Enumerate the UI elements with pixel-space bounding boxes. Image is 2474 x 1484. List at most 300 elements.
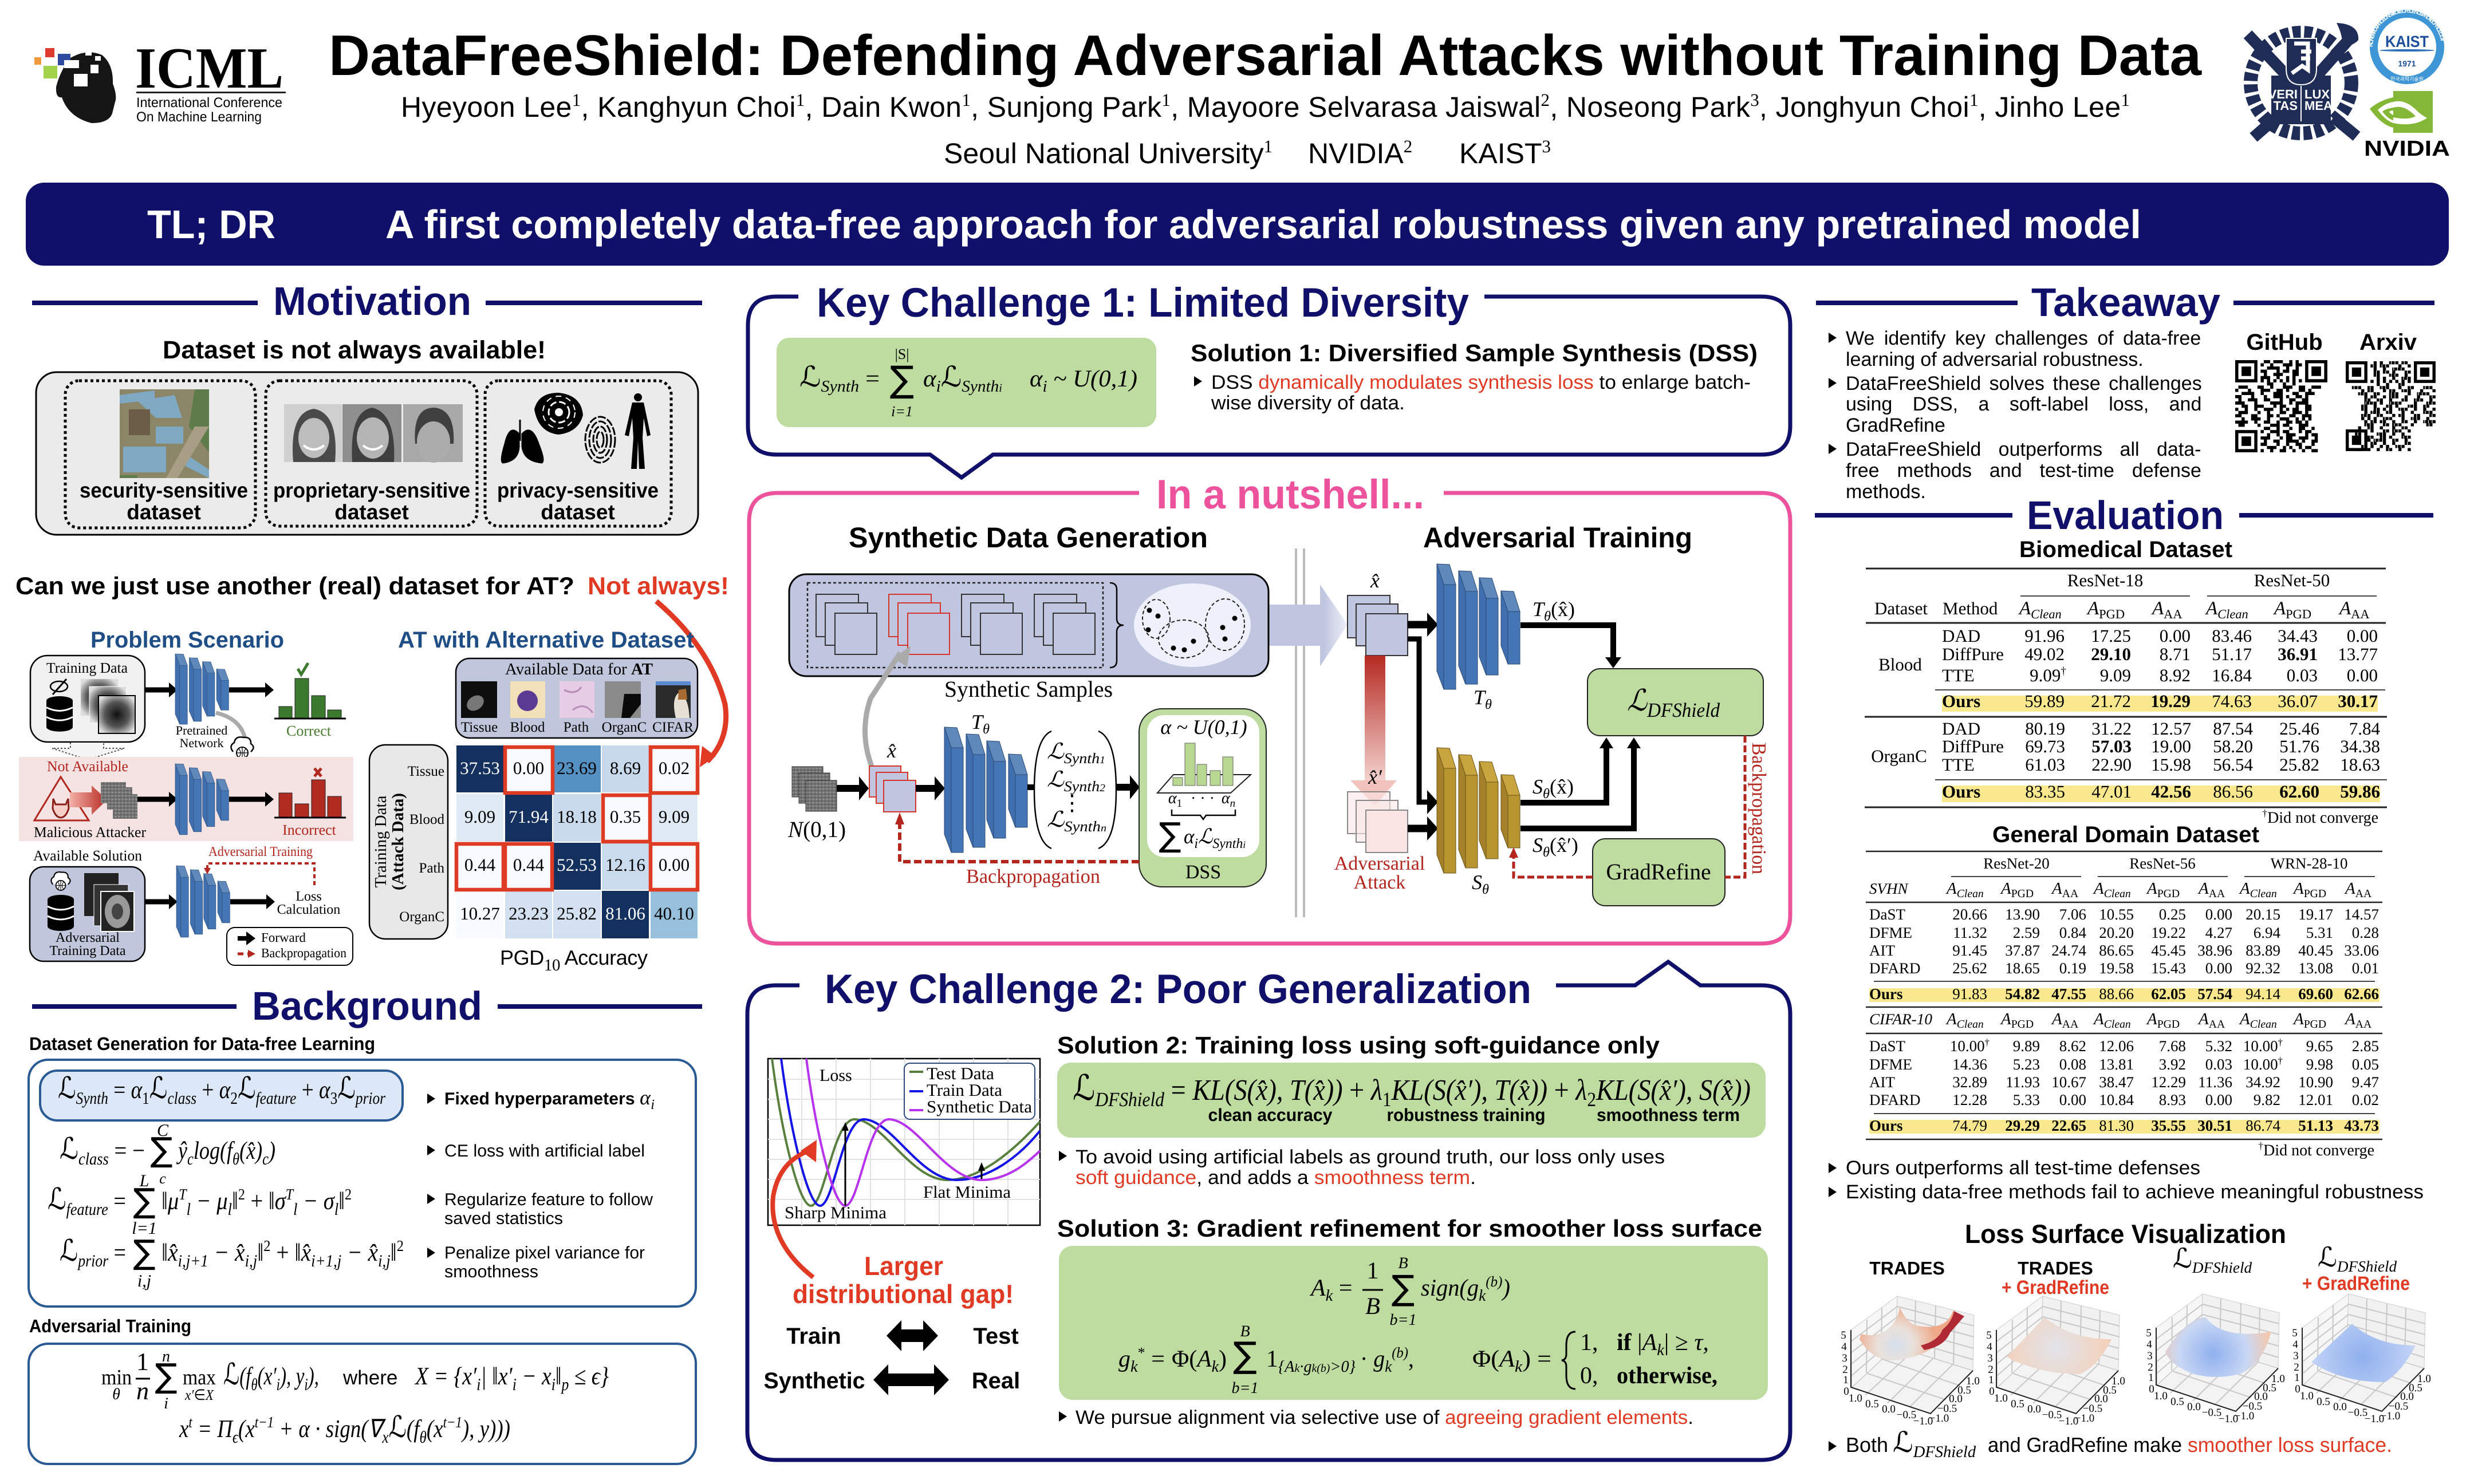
formula box: gradient refinement: gk* = xyxy=(1118,1344,1165,1376)
panel: key challenge 1 xyxy=(748,280,1790,477)
plot: L DFShield plus GradRefine: 0.5 xyxy=(2317,1396,2330,1408)
table: general domain: 10.55 xyxy=(2099,906,2134,923)
formula: L prior: ‖x̂i,j+1 − x̂i,j‖2 + ‖x̂i+1,j − x̂i,j‖2 xyxy=(161,1237,404,1270)
band: attacker xyxy=(19,757,353,841)
solution 1 heading: Solution 1: Diversified Sample Synthesis (DSS) xyxy=(1191,340,1758,366)
plot: L DFShield plus GradRefine: 1.0 xyxy=(2300,1390,2314,1402)
dashed backprop left xyxy=(895,812,1139,887)
plot: TRADES plus GradRefine: 1.0 xyxy=(1994,1392,2008,1404)
plot: L DFShield: −0.5 xyxy=(2243,1400,2262,1412)
math labels: Tθ xyxy=(1474,686,1492,712)
logo: KAIST: 한국과학기술원 xyxy=(2390,76,2424,82)
heatmap: 40.10 xyxy=(654,903,694,923)
table: general domain: 12.06 xyxy=(2099,1037,2134,1055)
formula box: L synth: αi ~ U(0,1) xyxy=(1030,366,1137,396)
plot: TRADES plus GradRefine: 2 xyxy=(1988,1364,1994,1376)
network: adversarial training xyxy=(176,866,230,937)
table: general domain: 34.92 xyxy=(2245,1073,2280,1091)
heatmap: 8.69 xyxy=(610,758,641,778)
formula box: gradient refinement: 1 xyxy=(1366,1258,1379,1284)
table: general domain: 47.55 xyxy=(2051,985,2086,1003)
loss list: ⋮ xyxy=(1061,791,1083,815)
plot: TRADES plus GradRefine: −1.0 xyxy=(2059,1415,2078,1427)
heatmap: 12.16 xyxy=(605,855,645,875)
table: general domain: 40.45 xyxy=(2298,942,2333,959)
labels: security-sensitive xyxy=(80,479,248,502)
subheading: dataset generation: Dataset Generation for Data-free Learning xyxy=(29,1033,375,1054)
table: general domain: AAA xyxy=(2052,1010,2078,1031)
plot: L DFShield: −1.0 xyxy=(2235,1410,2254,1422)
bullet notes xyxy=(427,1086,655,1281)
plot: L DFShield plus GradRefine: 1.0 xyxy=(2417,1373,2431,1385)
logo: Seoul National University: MEA xyxy=(2304,98,2333,113)
table: biomedical: 34.43 xyxy=(2278,626,2318,646)
arrow xyxy=(230,894,275,909)
bullet list: DataFreeShield outperforms all data- xyxy=(1846,439,2201,460)
table: biomedical: 58.20 xyxy=(2213,736,2253,756)
table: general domain: 14.36 xyxy=(1952,1056,1987,1073)
formula box: DFShield loss: smoothness term xyxy=(1597,1105,1740,1125)
panel: key challenge 2 xyxy=(747,962,1790,1460)
formula box: gradient refinement: sign(gk(b)) xyxy=(1421,1273,1510,1305)
plot: TRADES xyxy=(1841,1296,1980,1427)
logo: KAIST: 1971 xyxy=(2398,59,2416,68)
table: biomedical: 61.03 xyxy=(2025,755,2065,775)
table: biomedical: Blood xyxy=(1878,654,1922,674)
available data box: CIFAR xyxy=(652,720,694,735)
plot: TRADES plus GradRefine: 4 xyxy=(1987,1341,1992,1353)
bar chart: correct: Correct xyxy=(286,723,332,739)
table: general domain: AAA xyxy=(2052,879,2078,900)
table: biomedical: 56.54 xyxy=(2213,755,2253,775)
formula: min max: ℒ(fθ(x′i), yi), xyxy=(223,1357,319,1394)
plot: L DFShield plus GradRefine xyxy=(2292,1294,2431,1425)
diagram: problem scenario xyxy=(19,654,353,965)
logo: ICML: International Conference xyxy=(136,95,282,110)
DSS box: · · · xyxy=(1191,790,1215,807)
heading: Evaluation: Evaluation xyxy=(2027,493,2224,538)
not available arrow xyxy=(52,743,124,760)
solution 3 heading: Solution 3: Gradient refinement for smoother loss surface xyxy=(1057,1215,1762,1242)
synthetic samples box xyxy=(789,574,1268,676)
DSS box: α1 xyxy=(1168,790,1182,810)
formula box: gradient refinement: Φ(Ak) xyxy=(1172,1346,1227,1376)
arrow xyxy=(1116,775,1140,799)
solution 2 text: soft guidance , and adds a smoothness term . xyxy=(1076,1167,1476,1189)
feature space ellipse xyxy=(1134,583,1251,667)
plot: TRADES plus GradRefine: 5 xyxy=(1986,1329,1992,1341)
plot: L DFShield: 4 xyxy=(2146,1339,2152,1351)
table: general domain: APGD xyxy=(2001,879,2034,900)
arrow xyxy=(916,776,945,800)
arrow xyxy=(837,776,869,800)
table: general domain: 11.93 xyxy=(2006,1073,2040,1091)
formula: min max xyxy=(101,1348,609,1447)
table: biomedical: OrganC xyxy=(1871,746,1927,766)
formula: L class: c xyxy=(159,1170,166,1187)
logo: KAIST: KAIST xyxy=(2385,33,2429,50)
x-hat stack: x̂ xyxy=(887,739,896,762)
table: general domain: 10.00† xyxy=(2243,1055,2283,1073)
table: general domain: 14.57 xyxy=(2344,906,2379,923)
heatmap: 0.44 xyxy=(464,855,496,875)
table: general domain: 62.05 xyxy=(2151,985,2186,1003)
formula box: gradient refinement: Ak = xyxy=(1309,1275,1353,1305)
formula: L feature: l=1 xyxy=(132,1219,157,1238)
table: general domain: 6.94 xyxy=(2254,924,2280,941)
table: general domain: AIT xyxy=(1869,1073,1895,1091)
table: biomedical: 36.91 xyxy=(2278,644,2318,664)
icon: cell xyxy=(534,393,583,435)
table: general domain: 0.28 xyxy=(2352,924,2379,941)
network: pretrained xyxy=(175,654,229,724)
subheading: biomedical: Biomedical Dataset xyxy=(2019,537,2232,562)
available data box: Available Data for AT xyxy=(505,660,653,678)
caption: PGD10 accuracy: PGD10 Accuracy xyxy=(500,946,648,974)
label: available solution: Available Solution xyxy=(33,847,142,864)
panel: motivation xyxy=(15,279,729,974)
plot labels: + GradRefine xyxy=(2302,1273,2410,1294)
math labels xyxy=(1472,598,1578,897)
logo: ICML: On Machine Learning xyxy=(136,109,262,125)
table: general domain: †Did not converge xyxy=(2258,1140,2374,1159)
gray arrow xyxy=(865,646,911,766)
panel: evaluation xyxy=(1815,493,2433,1461)
heatmap: 37.53 xyxy=(460,758,500,778)
table: general domain: 5.33 xyxy=(2013,1091,2040,1108)
heatmap: 81.06 xyxy=(605,903,645,923)
formula: L synth xyxy=(40,1071,403,1120)
math labels: Sθ xyxy=(1472,871,1489,897)
formula box: L synth: αiℒSynthi xyxy=(923,360,1002,396)
plot: TRADES plus GradRefine: −0.5 xyxy=(2042,1409,2062,1421)
train test synthetic real: Train xyxy=(786,1324,841,1349)
table: general domain: 0.25 xyxy=(2159,906,2186,923)
formula: min max: x′∈X xyxy=(184,1387,214,1403)
table: biomedical: 83.35 xyxy=(2025,782,2065,802)
table: general domain: 0.00 xyxy=(2205,960,2232,977)
table: biomedical: 22.90 xyxy=(2091,755,2132,775)
formula: min max: n xyxy=(136,1377,149,1405)
plot: L DFShield: 1.0 xyxy=(2154,1390,2168,1402)
table: general domain: 19.22 xyxy=(2151,924,2186,941)
axis label box: Tissue xyxy=(408,764,444,779)
table: general domain: AClean xyxy=(2240,879,2277,900)
plot: TRADES: 0.5 xyxy=(1865,1398,1879,1410)
table: general domain: APGD xyxy=(2147,879,2180,900)
table: general domain: 92.32 xyxy=(2245,960,2280,977)
table: general domain: 0.19 xyxy=(2059,960,2086,977)
table: general domain: 32.89 xyxy=(1952,1073,1987,1091)
table: general domain: 10.00† xyxy=(1950,1037,1990,1055)
formula: min max: xt = Πϵ(xt−1 + α · sign(∇xℒ(fθ(xt−1), y))) xyxy=(179,1410,510,1447)
adversarial training data box xyxy=(30,867,145,961)
math labels: Sθ(x̂) xyxy=(1533,775,1574,802)
table: general domain: 12.28 xyxy=(1952,1091,1987,1108)
label: loss calculation: Calculation xyxy=(277,902,340,917)
legend: Backpropagation xyxy=(261,946,346,960)
table: general domain: 9.65 xyxy=(2306,1037,2333,1055)
formula box: gradient refinement: ∑ xyxy=(1233,1334,1257,1376)
stack: x hat: x̂ xyxy=(1370,569,1380,592)
bullet notes: Fixed hyperparameters αi xyxy=(444,1086,655,1112)
table: biomedical: 19.00 xyxy=(2151,736,2191,756)
table: general domain: 0.00 xyxy=(2059,1091,2086,1108)
table: general domain: DaST xyxy=(1869,906,1905,923)
formula box: L synth xyxy=(777,338,1156,427)
table: general domain: 9.82 xyxy=(2254,1091,2280,1108)
heatmap: 52.53 xyxy=(557,855,597,875)
plot: L DFShield: −0.5 xyxy=(2202,1407,2221,1419)
DSS box: αiℒSynthi xyxy=(1184,825,1246,851)
heatmap: 0.35 xyxy=(610,807,641,827)
plot: L DFShield: 0.0 xyxy=(2254,1391,2268,1403)
formula box: gradient refinement: b=1 xyxy=(1232,1379,1258,1397)
stack: x hat xyxy=(1348,569,1408,656)
heatmap xyxy=(456,745,698,938)
table: biomedical: Ours xyxy=(1942,782,1980,802)
axis label box: OrganC xyxy=(399,909,444,925)
plot: L DFShield plus GradRefine: 0 xyxy=(2295,1383,2300,1395)
table: biomedical: 29.10 xyxy=(2091,644,2131,664)
heading: Key Challenge 1: Limited Diversity xyxy=(817,280,1469,326)
table: biomedical: TTE xyxy=(1942,665,1975,685)
logo: Seoul National University: LUX xyxy=(2304,87,2330,101)
table: biomedical: 8.71 xyxy=(2160,644,2191,664)
adversarial training data box: Adversarial xyxy=(56,930,120,945)
table: general domain: 69.60 xyxy=(2298,985,2333,1003)
table: general domain: DaST xyxy=(1869,1037,1905,1055)
chart: loss landscape: Train Data xyxy=(927,1081,1002,1100)
table: general domain: 0.84 xyxy=(2059,924,2087,941)
big arrow xyxy=(1268,585,1348,666)
bullet notes: Penalize pixel variance for xyxy=(444,1244,645,1262)
table: general domain: 22.65 xyxy=(2051,1117,2086,1134)
DSS box: αn xyxy=(1222,790,1235,810)
table: general domain: APGD xyxy=(2001,1010,2034,1031)
table: biomedical: AAA xyxy=(2152,598,2183,621)
plot: L DFShield plus GradRefine: −0.5 xyxy=(2348,1407,2367,1419)
chart: loss landscape xyxy=(768,1059,1040,1225)
plot: L DFShield: 3 xyxy=(2147,1350,2153,1362)
table: general domain: 12.29 xyxy=(2151,1073,2186,1091)
formula box: gradient refinement: 1, xyxy=(1580,1329,1598,1356)
solution 1 text xyxy=(1194,372,1751,414)
QR: GitHub xyxy=(2235,330,2327,452)
plot: TRADES: 5 xyxy=(1841,1329,1846,1341)
plot: TRADES: 1.0 xyxy=(1966,1375,1980,1387)
solution 2 text: To avoid using artificial labels as ground truth, our loss only uses xyxy=(1076,1146,1665,1168)
closing bullet xyxy=(1829,1426,2392,1461)
table: biomedical: 36.07 xyxy=(2278,691,2318,711)
plot: TRADES plus GradRefine: −1.0 xyxy=(2075,1412,2094,1424)
solution 3 text: We pursue alignment via selective use of agreeing gradient elements . xyxy=(1076,1407,1693,1428)
formula: min max: max xyxy=(183,1365,216,1390)
table: general domain: 7.68 xyxy=(2159,1037,2186,1055)
formula: min max: where xyxy=(342,1367,397,1389)
table: general domain: AClean xyxy=(2094,879,2131,900)
table: general domain: 91.83 xyxy=(1952,985,1987,1003)
formula: min max: min xyxy=(101,1365,132,1390)
table: general domain: 29.29 xyxy=(2005,1117,2040,1134)
plot: L DFShield plus GradRefine: 0.0 xyxy=(2400,1391,2414,1403)
table: general domain: 0.00 xyxy=(2205,1091,2232,1108)
plot labels: TRADES xyxy=(2018,1258,2093,1278)
box: GradRefine xyxy=(1593,839,1725,906)
plot: TRADES: 1 xyxy=(1843,1374,1849,1386)
chart: loss landscape: Sharp Minima xyxy=(785,1203,887,1222)
table: general domain: 5.31 xyxy=(2306,924,2333,941)
title: DataFreeShield: Defending Adversarial Attacks without Training Data xyxy=(329,23,2202,88)
formula: min max: X = {x′i| ‖x′i − xi‖p ≤ ϵ} xyxy=(414,1362,609,1394)
formula box: gradient refinement: if |Ak| ≥ τ, xyxy=(1617,1329,1709,1359)
table: general domain: AIT xyxy=(1869,942,1895,959)
heatmap: 25.82 xyxy=(557,903,597,923)
logo: NVIDIA: NVIDIA xyxy=(2364,137,2450,161)
formula box: gradient refinement: otherwise, xyxy=(1617,1363,1717,1389)
label and dashed arrow: adversarial training: Adversarial Training xyxy=(208,844,313,859)
table: general domain: 35.55 xyxy=(2151,1117,2186,1134)
table: general domain: 20.15 xyxy=(2245,906,2280,923)
table: general domain: SVHN xyxy=(1869,880,1909,897)
formula: L class: C xyxy=(157,1121,169,1140)
label: pretrained network xyxy=(176,723,227,750)
table: general domain: 8.93 xyxy=(2159,1091,2186,1108)
panel: in a nutshell xyxy=(749,472,1790,944)
table: biomedical: 30.17 xyxy=(2338,691,2378,711)
formula box: gradient refinement: B xyxy=(1365,1293,1380,1320)
plot: TRADES plus GradRefine: 0 xyxy=(1989,1386,1995,1398)
table: biomedical: 47.01 xyxy=(2091,782,2132,802)
table: biomedical: DiffPure xyxy=(1942,736,2004,756)
table: general domain: Ours xyxy=(1869,1117,1903,1134)
formula box: L synth: ℒSynth = xyxy=(799,360,880,396)
icon: lungs xyxy=(502,420,543,463)
table: biomedical: 59.89 xyxy=(2024,691,2065,711)
plot: L DFShield plus GradRefine: 0.5 xyxy=(2409,1382,2422,1394)
subheading: synthetic data generation: Synthetic Data Generation xyxy=(849,522,1208,554)
labels: dataset xyxy=(541,500,615,524)
arrow: red attack xyxy=(1350,656,1397,806)
table: general domain: DFARD xyxy=(1869,960,1921,977)
frame xyxy=(749,493,1790,944)
plot: L DFShield: 1.0 xyxy=(2271,1373,2285,1385)
formula box: gradient refinement: b=1 xyxy=(1390,1311,1416,1329)
image: aerial photo xyxy=(120,389,209,478)
subheading: general domain: General Domain Dataset xyxy=(1992,822,2259,847)
bullet list: We identify key challenges of data-free xyxy=(1846,327,2201,349)
formula: min max: n xyxy=(162,1348,170,1365)
plot: TRADES plus GradRefine: 3 xyxy=(1987,1352,1993,1364)
axis label box: Path xyxy=(419,861,444,876)
frame: speech bubble xyxy=(748,297,1790,477)
table: general domain: 20.20 xyxy=(2099,924,2134,941)
DSS box xyxy=(1139,709,1266,887)
heatmap: 0.00 xyxy=(513,758,544,778)
formula box: gradient refinement: 0, xyxy=(1580,1363,1598,1389)
diagram: AT with alternative dataset xyxy=(369,658,698,974)
bullet list: methods. xyxy=(1846,481,1926,503)
solution 1 text: DSS dynamically modulates synthesis loss to enlarge batch- xyxy=(1211,372,1751,393)
callout: larger distributional gap: distributional gap! xyxy=(793,1279,1014,1309)
table: general domain: 4.27 xyxy=(2205,924,2232,941)
table: biomedical: DAD xyxy=(1942,719,1980,739)
table: biomedical: 69.73 xyxy=(2025,736,2065,756)
arrows into T and S xyxy=(1408,613,1438,840)
arrow: gray copy xyxy=(213,713,245,779)
plot: TRADES: −1.0 xyxy=(1913,1415,1933,1427)
band: attacker: Incorrect xyxy=(282,822,337,838)
arrows into loss xyxy=(1520,625,1641,828)
formula box: L synth: i=1 xyxy=(891,403,913,420)
banner: TL;DR: TL; DR xyxy=(147,202,275,247)
labels: privacy-sensitive xyxy=(497,479,659,502)
network: T xyxy=(944,727,1027,852)
table: biomedical: 8.92 xyxy=(2160,665,2191,685)
formula: L synth: ℒSynth = α1ℒclass + α2ℒfeature + α3ℒprior xyxy=(58,1071,385,1108)
icon: cloud xyxy=(231,737,253,759)
table: general domain: APGD xyxy=(2294,879,2326,900)
table: biomedical: 83.46 xyxy=(2212,626,2252,646)
chart: loss landscape: Loss xyxy=(820,1066,852,1085)
plot: TRADES plus GradRefine: −0.5 xyxy=(2083,1403,2102,1415)
formula box: gradient refinement: · gk(b), xyxy=(1360,1344,1414,1376)
formula box: gradient refinement: B xyxy=(1240,1323,1250,1340)
labels: dataset xyxy=(334,500,409,524)
table: general domain: 38.47 xyxy=(2099,1073,2134,1091)
table: general domain: 43.73 xyxy=(2344,1117,2379,1134)
plot: L DFShield: 0.0 xyxy=(2187,1401,2201,1413)
box: L DFShield: ℒDFShield xyxy=(1627,685,1720,721)
plot: TRADES: 1.0 xyxy=(1849,1392,1862,1404)
table: general domain: AClean xyxy=(1947,1010,1984,1031)
plot: TRADES: −0.5 xyxy=(1897,1409,1916,1421)
table: general domain: 30.51 xyxy=(2197,1117,2232,1134)
table: general domain: 0.05 xyxy=(2352,1056,2379,1073)
label: T theta: Tθ xyxy=(971,711,990,737)
adversarial training data box: Training Data xyxy=(49,944,126,958)
formula: L feature xyxy=(48,1171,352,1238)
formula: L feature: ∑ xyxy=(133,1181,156,1220)
DSS box: ∑ xyxy=(1159,815,1181,854)
subheading: adversarial training: Adversarial Training xyxy=(29,1316,191,1336)
dashed backprop right xyxy=(1509,736,1770,877)
stack: x hat prime: x̂′ xyxy=(1368,765,1382,788)
formula: min max: ∑ xyxy=(155,1356,178,1395)
logo: ICML: ICML xyxy=(135,36,283,101)
label: loss calculation xyxy=(277,889,340,917)
bullet list: GradRefine xyxy=(1846,415,1945,436)
table: general domain: 0.03 xyxy=(2205,1056,2232,1073)
formula: min max: 1 xyxy=(136,1348,149,1376)
heatmap: 9.09 xyxy=(464,807,495,827)
plot: L DFShield plus GradRefine: −1.0 xyxy=(2365,1413,2384,1425)
plot: L DFShield plus GradRefine: −1.0 xyxy=(2381,1410,2400,1422)
table: biomedical: APGD xyxy=(2274,598,2311,621)
DSS box: α ~ U(0,1) xyxy=(1160,716,1247,739)
plot: L DFShield plus GradRefine: 2 xyxy=(2294,1361,2299,1374)
table: biomedical: 7.84 xyxy=(2349,719,2380,739)
bullet list: free methods and test-time defense xyxy=(1846,460,2201,481)
plot: L DFShield plus GradRefine: 5 xyxy=(2292,1327,2298,1339)
table: biomedical: Method xyxy=(1943,598,1998,618)
bullet notes: smoothness xyxy=(444,1262,538,1281)
table: biomedical: 87.54 xyxy=(2213,719,2253,739)
train test synthetic real: Real xyxy=(972,1368,1020,1394)
table: general domain: 38.96 xyxy=(2197,942,2232,959)
formula: L prior: i,j xyxy=(137,1272,151,1290)
table: general domain: 86.65 xyxy=(2099,942,2134,959)
